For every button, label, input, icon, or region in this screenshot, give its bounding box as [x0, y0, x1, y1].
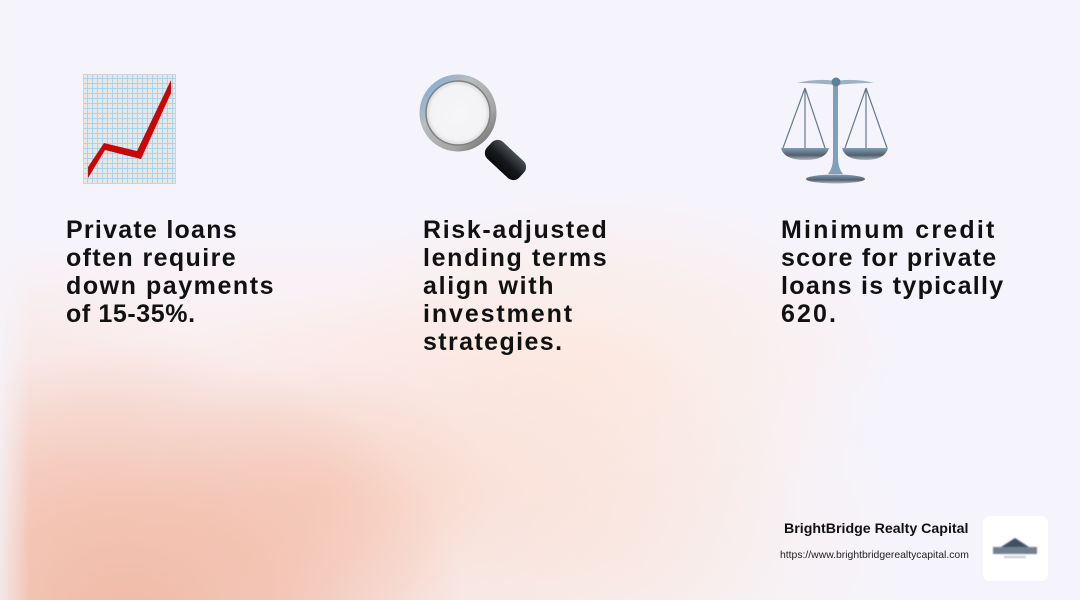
text: risk-adjusted terms: lending terms	[423, 244, 608, 272]
text: minimum credit score	[781, 216, 1004, 328]
text: minimum credit score: loans is typically	[781, 272, 1004, 300]
text: minimum credit score: score for private	[781, 244, 997, 272]
text: minimum credit score: Minimum credit	[781, 216, 997, 244]
text: risk-adjusted terms: strategies.	[423, 328, 563, 356]
text: risk-adjusted terms: Risk-adjusted	[423, 216, 608, 244]
icon: logo roof	[992, 537, 1038, 559]
logo card	[983, 516, 1048, 581]
strings	[783, 88, 887, 148]
column	[828, 84, 843, 174]
text: down payments	[66, 216, 275, 328]
company url: https://www.brightbridgerealtycapital.com	[780, 550, 969, 561]
text: down payments: of 15-35%.	[66, 300, 196, 328]
text: down payments: often require	[66, 244, 237, 272]
icon: chart with rising red line	[83, 74, 176, 184]
icon: magnifying glass	[420, 74, 526, 180]
icon: balance scale	[781, 78, 888, 184]
pans	[781, 148, 829, 160]
company name: BrightBridge Realty Capital	[784, 521, 968, 537]
beam	[797, 80, 874, 85]
text: risk-adjusted terms	[423, 216, 608, 356]
text: risk-adjusted terms: align with	[423, 272, 555, 300]
text: risk-adjusted terms: investment	[423, 300, 574, 328]
text: down payments: Private loans	[66, 216, 238, 244]
text: down payments: down payments	[66, 272, 275, 300]
text: minimum credit score: 620.	[781, 300, 838, 328]
